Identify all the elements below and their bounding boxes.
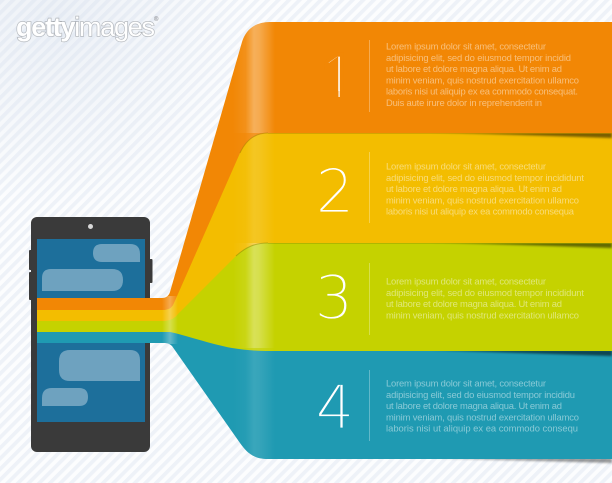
text block 2: Lorem ipsum dolor sit amet, consectetur (386, 160, 546, 172)
text block 1 (386, 40, 579, 108)
text block 4 (386, 378, 579, 434)
text block 2: laboris nisi ut aliquip ex ea commodo consequa (386, 206, 575, 217)
text block 3: Lorem ipsum dolor sit amet, consectetur (386, 276, 546, 286)
text block 3: ut labore et dolore magna aliqua. Ut enim ad (386, 298, 562, 309)
number 1 (328, 56, 340, 97)
phone screen (37, 239, 145, 422)
divider 3 (369, 263, 370, 335)
text block 3 (386, 276, 584, 320)
divider 4 (369, 370, 370, 441)
chat bubble 1 (93, 244, 140, 262)
chat bubble 2 (42, 269, 123, 291)
phone camera (88, 224, 93, 229)
panel: teal ribbon (37, 332, 612, 459)
text block 2 (386, 160, 584, 217)
text block 4: ut labore et dolore magna aliqua. Ut enim ad (386, 400, 562, 411)
phone (29, 217, 152, 452)
number 1: 1 (321, 42, 355, 110)
text block 1: Duis aute irure dolor in reprehenderit in (386, 97, 542, 108)
panel: orange ribbon (37, 22, 612, 312)
section 3 content (315, 263, 584, 335)
number 4: 4 (316, 373, 354, 443)
ribbon fold shadows (236, 132, 612, 463)
text block 2: adipisicing elit, sed do eiusmod tempor incididunt (386, 172, 584, 183)
phone body (31, 217, 150, 452)
divider 1 (369, 40, 370, 112)
phone side buttons (29, 250, 152, 300)
section 2 content (316, 152, 584, 227)
text block 1: ut labore et dolore magna aliqua. Ut enim ad (386, 63, 562, 74)
section 4 content (316, 370, 579, 443)
text block 3: adipisicing elit, sed do eiusmod tempor incididunt (386, 287, 584, 298)
background top-left tint (0, 0, 260, 220)
panel: yellow ribbon (37, 133, 612, 323)
watermark logo: gettyimages (16, 12, 155, 42)
watermark logo: gettyimages (16, 12, 155, 42)
text block 4: laboris nisi ut aliquip ex ea commodo consequ (386, 423, 578, 434)
chat bubble 4 (42, 388, 88, 406)
text block 1: minim veniam, quis nostrud exercitation ullamco (386, 74, 579, 85)
text block 1: Lorem ipsum dolor sit amet, consectetur (386, 40, 546, 52)
number 2: 2 (316, 157, 354, 227)
chat bubble 3 (59, 350, 140, 381)
divider 2 (369, 152, 370, 223)
text block 2: minim veniam, quis nostrud exercitation ullamco (386, 194, 579, 205)
text block 4: minim veniam, quis nostrud exercitation ullamco (386, 411, 579, 422)
text block 2: ut labore et dolore magna aliqua. Ut enim ad (386, 183, 562, 194)
watermark logo: ® (154, 16, 159, 23)
text block 4: Lorem ipsum dolor sit amet, consectetur (386, 378, 546, 388)
text block 1: adipisicing elit, sed do eiusmod tempor incidid (386, 52, 571, 63)
text block 4: adipisicing elit, sed do eiusmod tempor incididu (386, 389, 575, 400)
text block 3: minim veniam, quis nostrud exercitation ullamco (386, 309, 579, 320)
section 1 content (321, 40, 579, 112)
text block 1: laboris nisi ut aliquip ex ea commodo consequat. (386, 86, 578, 97)
number 3: 3 (315, 263, 353, 333)
ribbon light highlights (162, 22, 275, 460)
panel: green ribbon (37, 243, 612, 353)
